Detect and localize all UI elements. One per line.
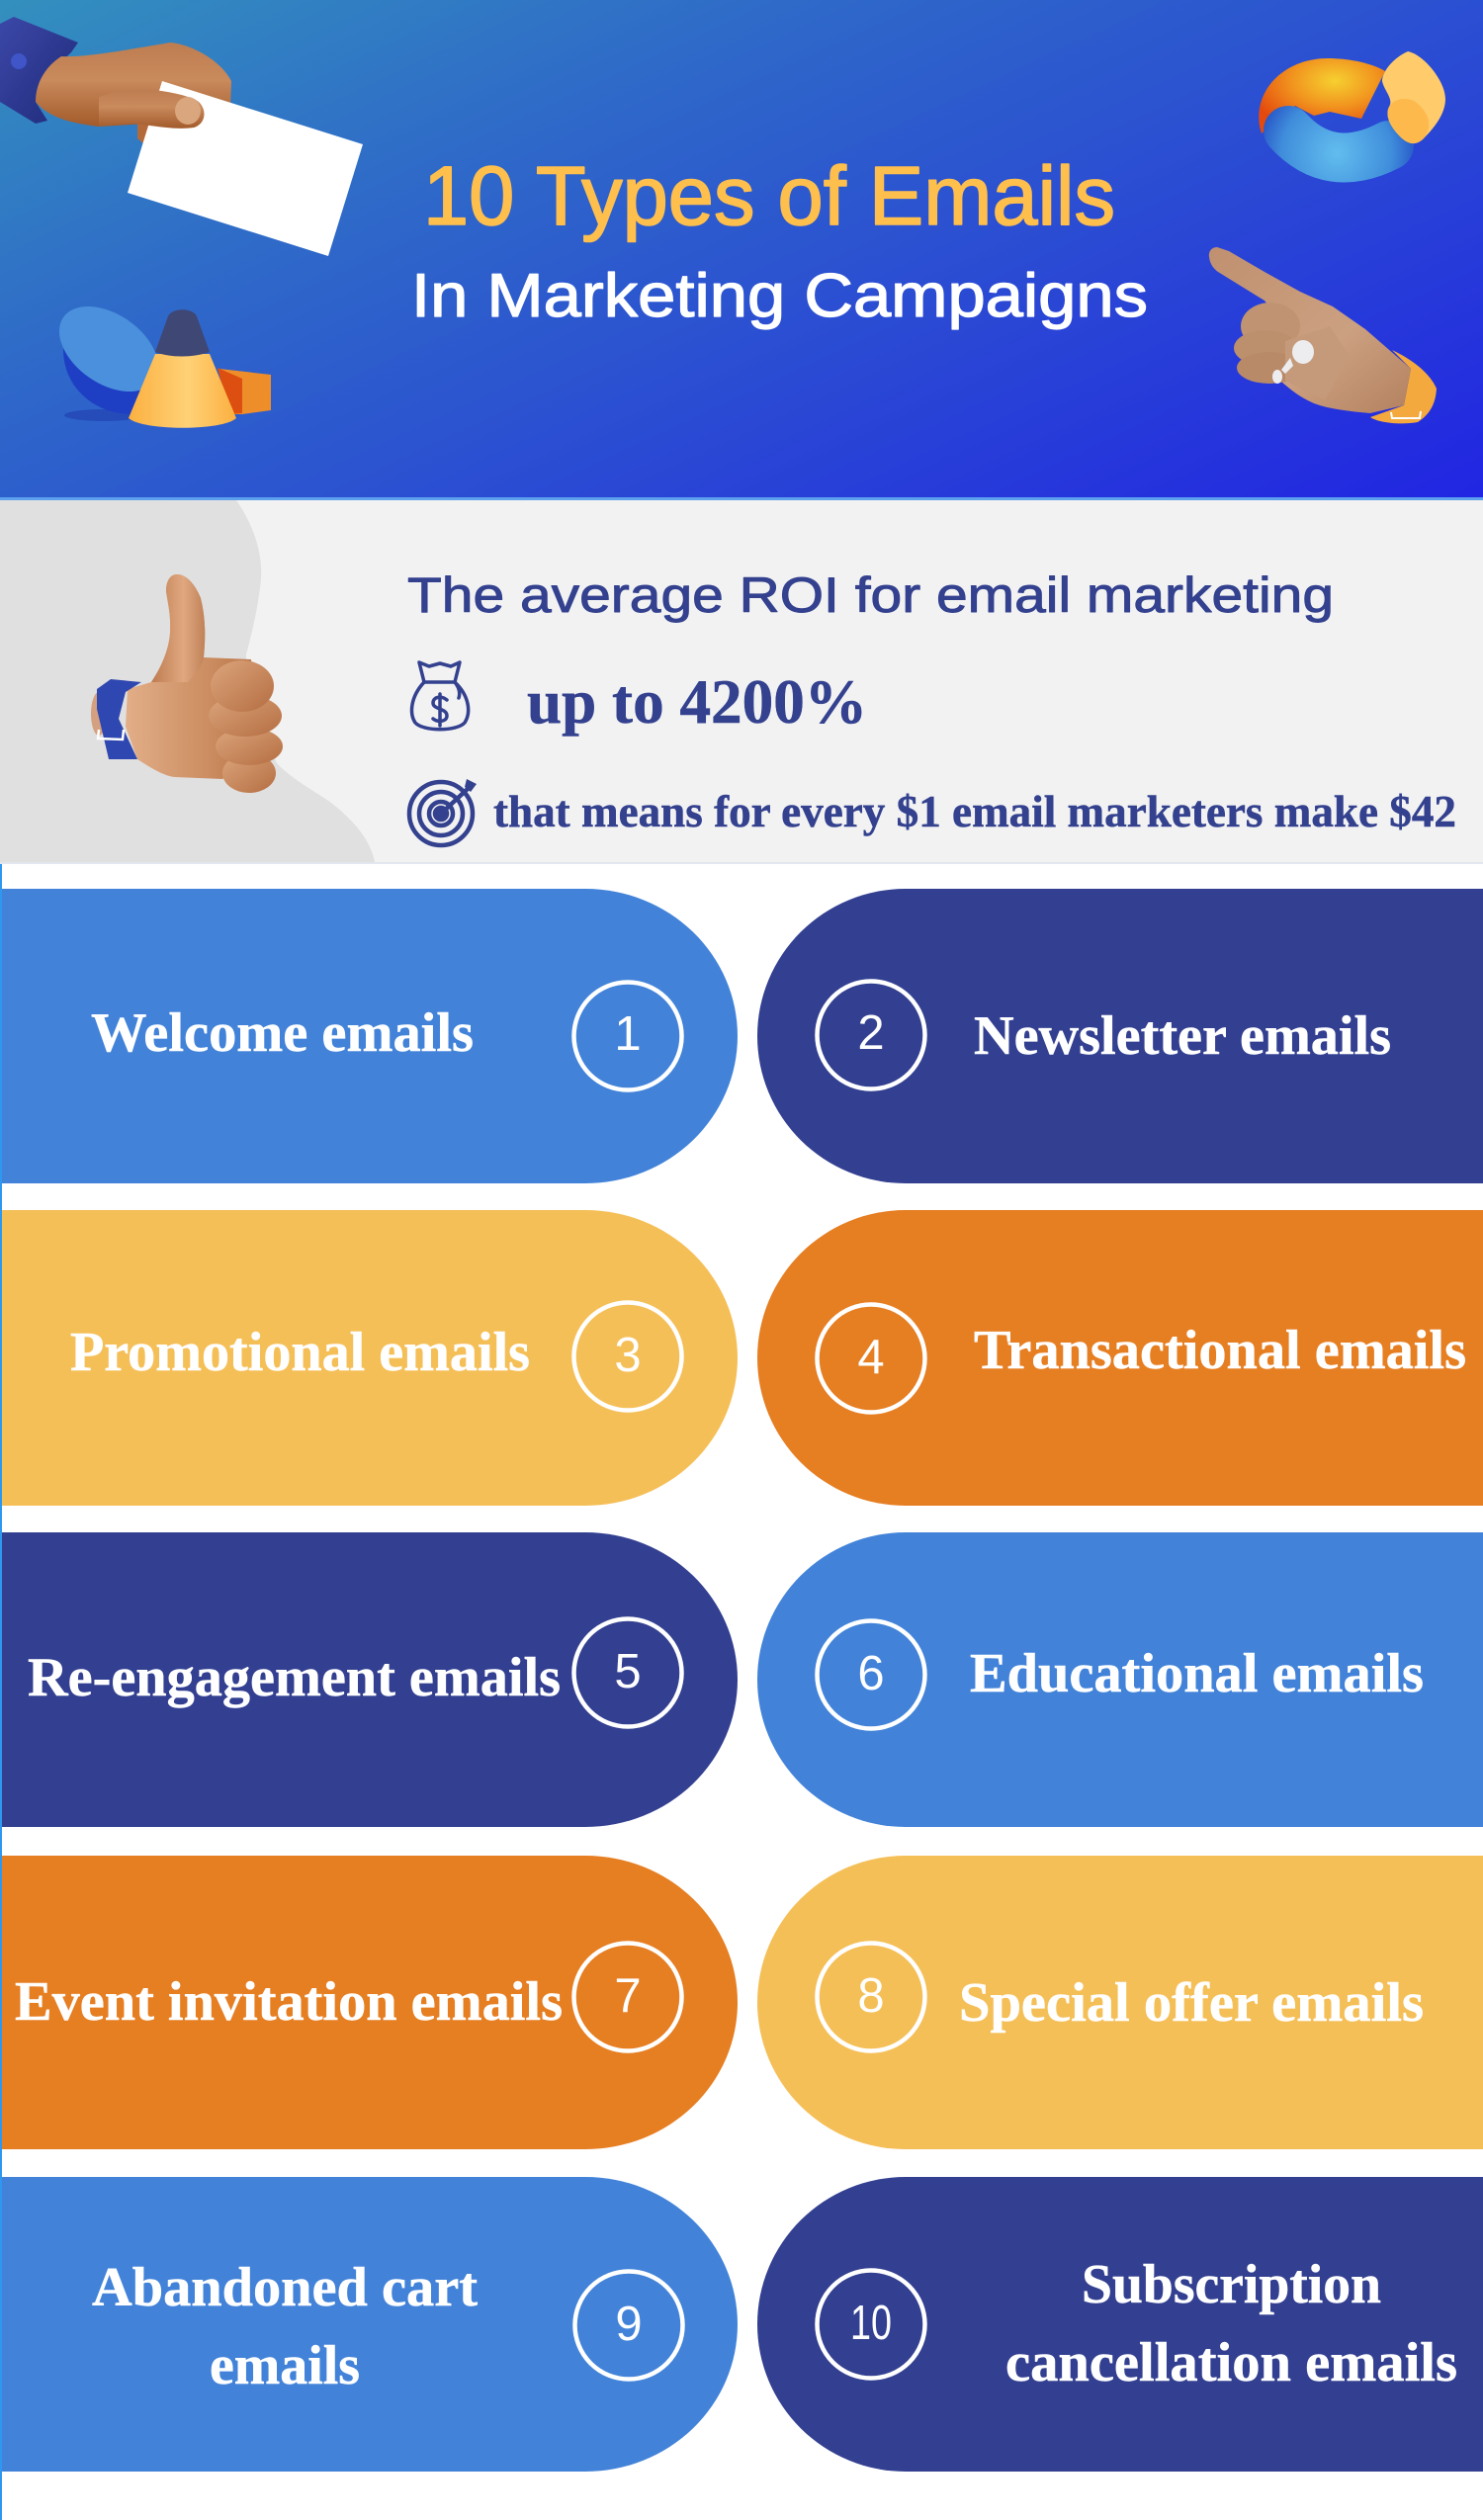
number 3	[573, 1303, 682, 1410]
number 8	[817, 1944, 925, 2050]
header banner	[0, 0, 1483, 500]
left edge line	[0, 864, 2, 2520]
card 10: subscription cancellation emails: cancellation emails	[1005, 2332, 1457, 2393]
number 7: 7	[614, 1969, 642, 2023]
card 8: special offer emails	[757, 1856, 1483, 2149]
title line 2: In Marketing Campaigns	[411, 262, 1148, 330]
card 1: welcome emails: Welcome emails	[91, 1002, 474, 1064]
card 2: newsletter emails	[757, 889, 1483, 1183]
number 3: 3	[614, 1329, 642, 1382]
number 4: 4	[857, 1331, 885, 1384]
number 6	[817, 1621, 925, 1728]
card 9: abandoned cart emails	[2, 2177, 738, 2472]
text: dollar return: that means for every $1 email marketers make $42	[493, 787, 1456, 836]
icon: 3D shapes, bowl cone and block	[44, 289, 271, 428]
card 3: promotional emails: Promotional emails	[70, 1322, 530, 1383]
card 4: transactional emails	[757, 1210, 1483, 1506]
number 10	[817, 2270, 925, 2379]
card 9: abandoned cart emails: Abandoned cart	[92, 2257, 478, 2318]
card 8: special offer emails: Special offer emails	[959, 1972, 1424, 2034]
card 9: abandoned cart emails: emails	[210, 2335, 360, 2396]
number 5	[573, 1619, 682, 1726]
icon: target with arrow	[409, 779, 477, 845]
number 6: 6	[857, 1647, 885, 1700]
card 10: subscription cancellation emails	[757, 2177, 1483, 2472]
number 4	[817, 1305, 925, 1412]
icon: money bag	[412, 662, 469, 730]
number 7	[573, 1944, 682, 2050]
card 6: educational emails: Educational emails	[970, 1643, 1424, 1704]
title line 1: 10 Types of Emails	[423, 149, 1115, 242]
number 10: 10	[850, 2297, 892, 2350]
card 7: event invitation emails: Event invitation emails	[15, 1971, 563, 2033]
text: ROI heading: The average ROI for email marketing	[407, 567, 1334, 623]
icon: pointing hand with watch	[1209, 247, 1437, 423]
icon: thumbs up hand	[91, 574, 283, 793]
card 1: welcome emails	[2, 889, 738, 1183]
number 2	[817, 981, 925, 1089]
number 1	[573, 983, 682, 1089]
card 5: re-engagement emails: Re-engagement emails	[28, 1647, 561, 1708]
card 3: promotional emails	[2, 1210, 738, 1506]
icon: orange and blue torus	[1259, 51, 1445, 157]
title	[411, 149, 1148, 330]
number 1: 1	[614, 1007, 642, 1061]
number 8: 8	[857, 1969, 885, 2023]
number 2: 2	[857, 1006, 885, 1060]
card 7: event invitation emails	[2, 1856, 738, 2149]
icon: hand holding blank card	[0, 17, 363, 256]
card 4: transactional emails: Transactional emails	[974, 1320, 1466, 1381]
number 9: 9	[615, 2298, 643, 2351]
card 2: newsletter emails: Newsletter emails	[974, 1005, 1391, 1067]
number 9	[575, 2272, 682, 2379]
text: ROI value: up to 4200%	[527, 667, 867, 737]
card 6: educational emails	[757, 1532, 1483, 1827]
number 5: 5	[614, 1645, 642, 1698]
card 10: subscription cancellation emails: Subscription	[1082, 2254, 1381, 2315]
card 5: re-engagement emails	[2, 1532, 738, 1827]
panel: average ROI statistic	[0, 500, 1483, 864]
